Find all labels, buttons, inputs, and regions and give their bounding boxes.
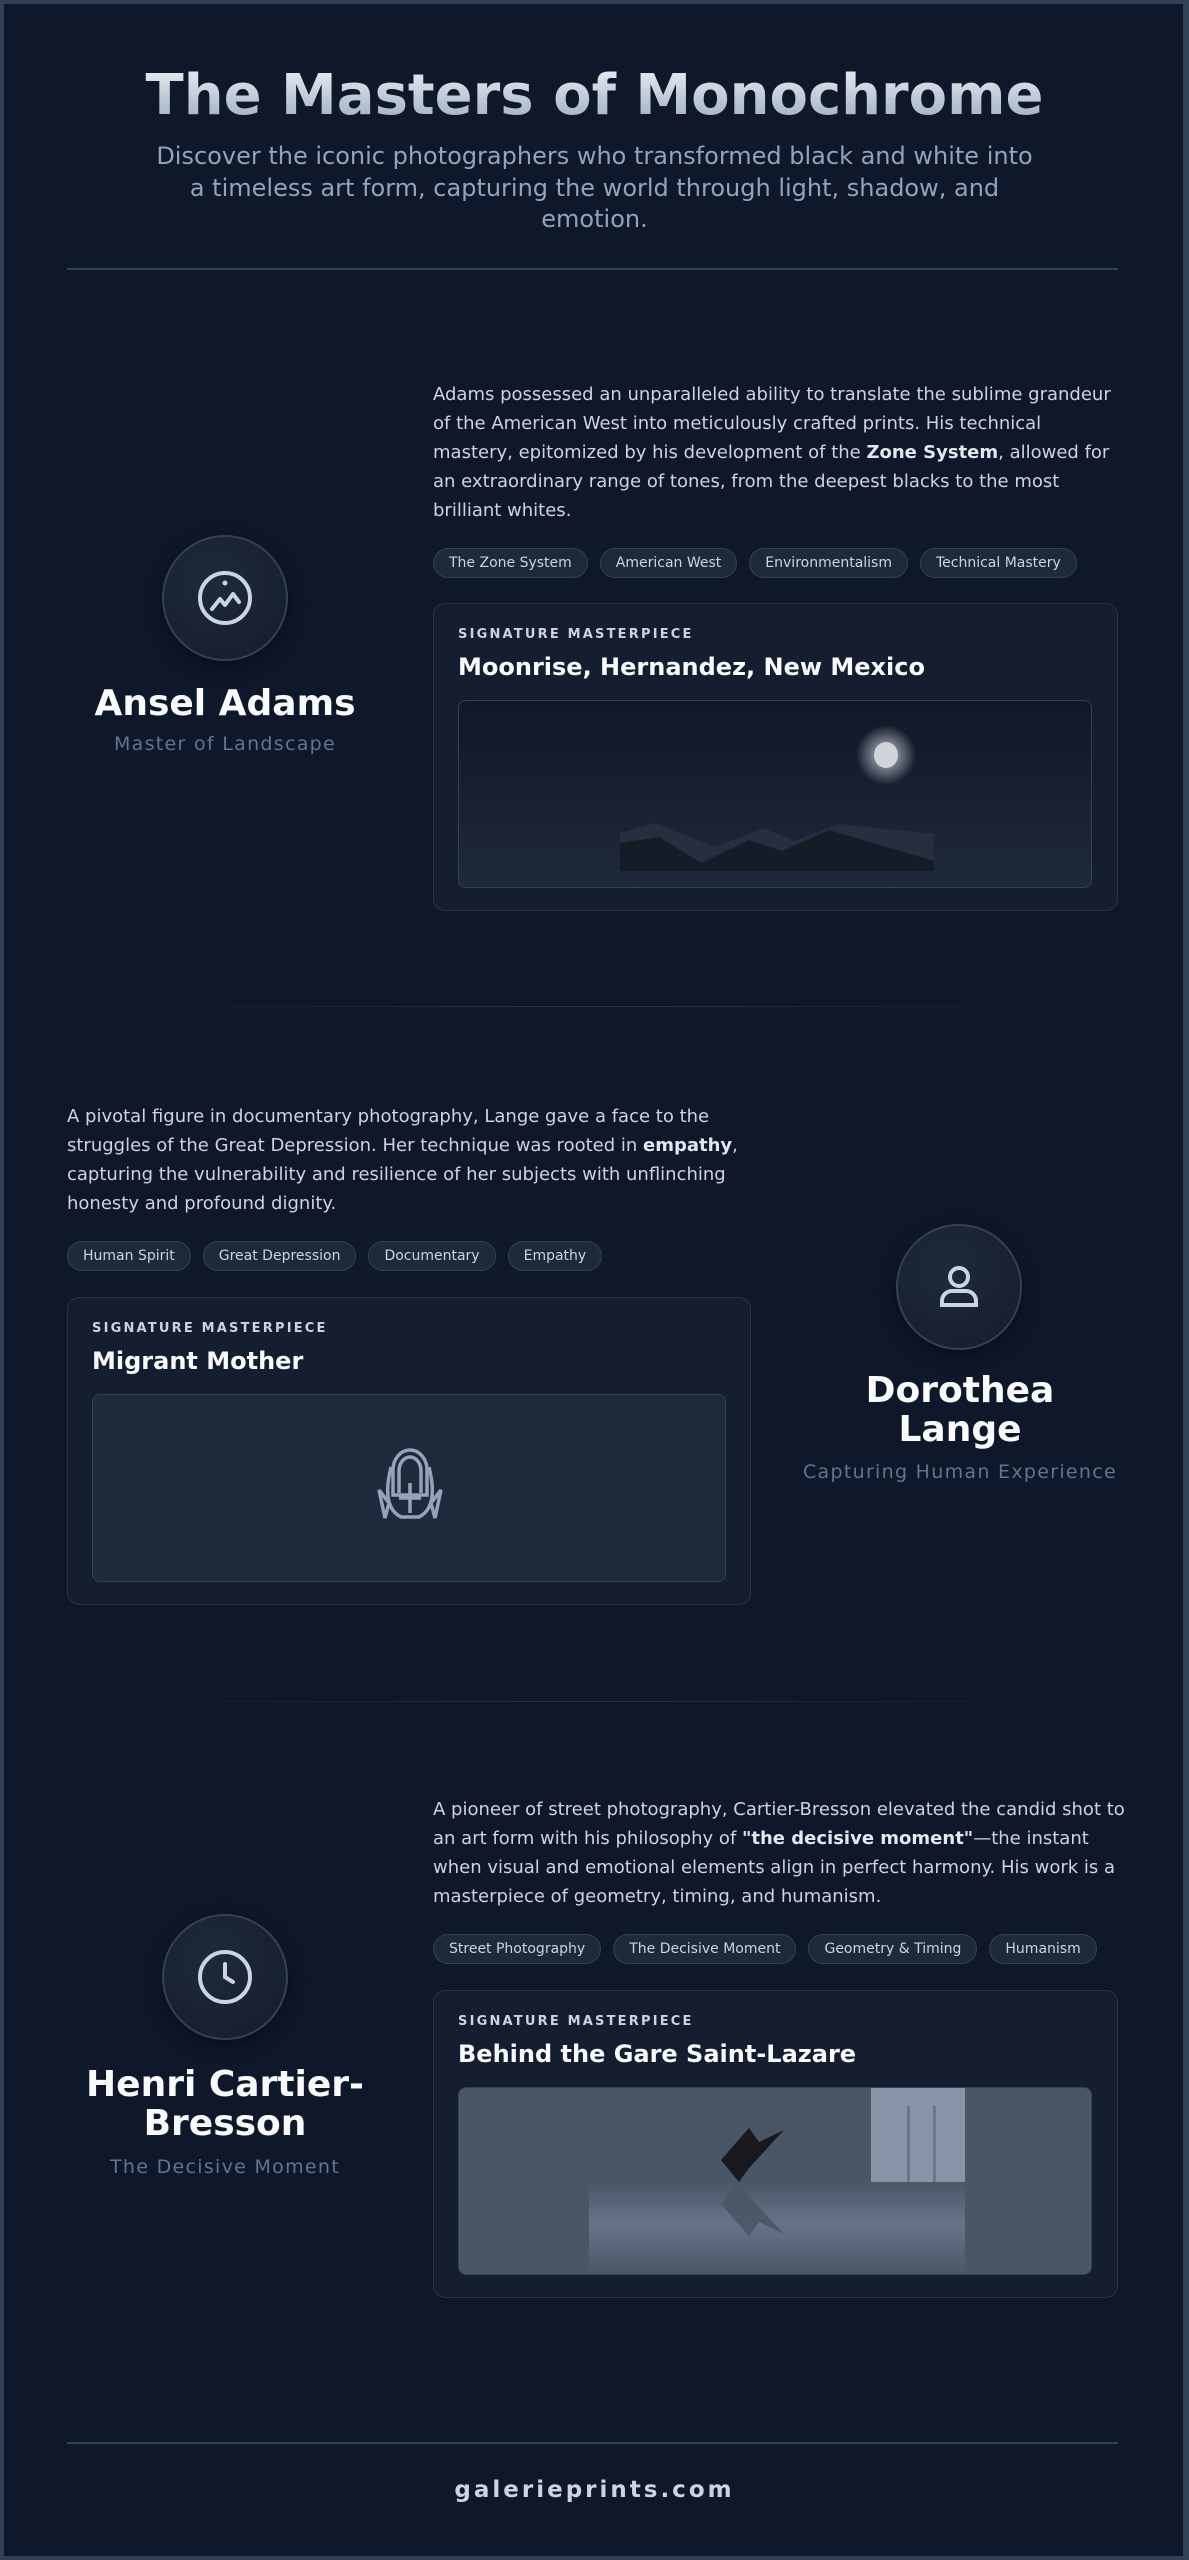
name: Dorothea Lange bbox=[866, 1370, 1054, 1450]
title: The Masters of Monochrome bbox=[146, 63, 1043, 128]
footer: galerieprints.com bbox=[454, 2477, 735, 2503]
role: Capturing Human Experience bbox=[803, 1461, 1117, 1483]
section: Henri Cartier-Bresson bbox=[86, 1799, 1125, 2298]
card: masterpiece: SIGNATURE MASTERPIECE bbox=[458, 627, 694, 642]
tags: Humanism bbox=[1005, 1941, 1081, 1957]
tags: Human Spirit bbox=[83, 1248, 175, 1264]
tags: Empathy bbox=[524, 1248, 586, 1264]
card: masterpiece: SIGNATURE MASTERPIECE bbox=[458, 2014, 694, 2029]
icon: landscape bbox=[162, 535, 288, 661]
role: The Decisive Moment bbox=[110, 2156, 340, 2178]
card: masterpiece: Migrant Mother bbox=[92, 1347, 303, 1375]
tags: The Zone System bbox=[449, 555, 572, 571]
card: masterpiece: Moonrise, Hernandez, New Mexico bbox=[458, 653, 925, 681]
icon: person bbox=[896, 1224, 1022, 1350]
tags bbox=[433, 548, 1077, 578]
subtitle: Discover the iconic photographers who transformed black and white into a timeless art form, capturing the world through light, shadow, and emotion. bbox=[156, 142, 1033, 233]
section: Ansel Adams bbox=[94, 384, 1118, 911]
tags bbox=[433, 1934, 1097, 1964]
tags bbox=[67, 1241, 602, 1271]
tags: American West bbox=[616, 555, 721, 571]
image: moonrise bbox=[458, 700, 1092, 888]
icon: clock bbox=[162, 1914, 288, 2040]
name: Henri Cartier-Bresson bbox=[86, 2064, 364, 2144]
image: gare saint-lazare bbox=[458, 2087, 1092, 2275]
paragraph: Adams possessed an unparalleled ability to translate the sublime grandeur of the American West into meticulously crafted prints. His technical mastery, epitomized by his development of the Zone System, allowed for an extraordinary range of tones, from the deepest blacks to the most brilliant whites. bbox=[433, 384, 1111, 521]
image: migrant mother icon bbox=[92, 1394, 726, 1582]
paragraph: A pivotal figure in documentary photography, Lange gave a face to the struggles of the Great Depression. Her technique was rooted in empathy, capturing the vulnerability and resilience of her subjects with unflinching honesty and profound dignity. bbox=[67, 1106, 738, 1214]
card: masterpiece bbox=[67, 1297, 751, 1605]
card: masterpiece: SIGNATURE MASTERPIECE bbox=[92, 1321, 328, 1336]
card: masterpiece bbox=[433, 603, 1118, 911]
role: Master of Landscape bbox=[114, 733, 336, 755]
tags: Documentary bbox=[384, 1248, 480, 1264]
tags: Environmentalism bbox=[765, 555, 892, 571]
tags: The Decisive Moment bbox=[629, 1941, 780, 1957]
section: Dorothea Lange bbox=[67, 1106, 1117, 1605]
tags: Geometry & Timing bbox=[824, 1941, 961, 1957]
name: Ansel Adams bbox=[94, 683, 356, 724]
card: masterpiece bbox=[433, 1990, 1118, 2298]
tags: Great Depression bbox=[219, 1248, 340, 1264]
card: masterpiece: Behind the Gare Saint-Lazare bbox=[458, 2040, 856, 2068]
paragraph: A pioneer of street photography, Cartier-Bresson elevated the candid shot to an art form with his philosophy of "the decisive moment"—the instant when visual and emotional elements align in perfect harmony. His work is a masterpiece of geometry, timing, and humanism. bbox=[433, 1799, 1125, 1907]
tags: Street Photography bbox=[449, 1941, 585, 1957]
tags: Technical Mastery bbox=[936, 555, 1061, 571]
title bbox=[0, 59, 1189, 133]
